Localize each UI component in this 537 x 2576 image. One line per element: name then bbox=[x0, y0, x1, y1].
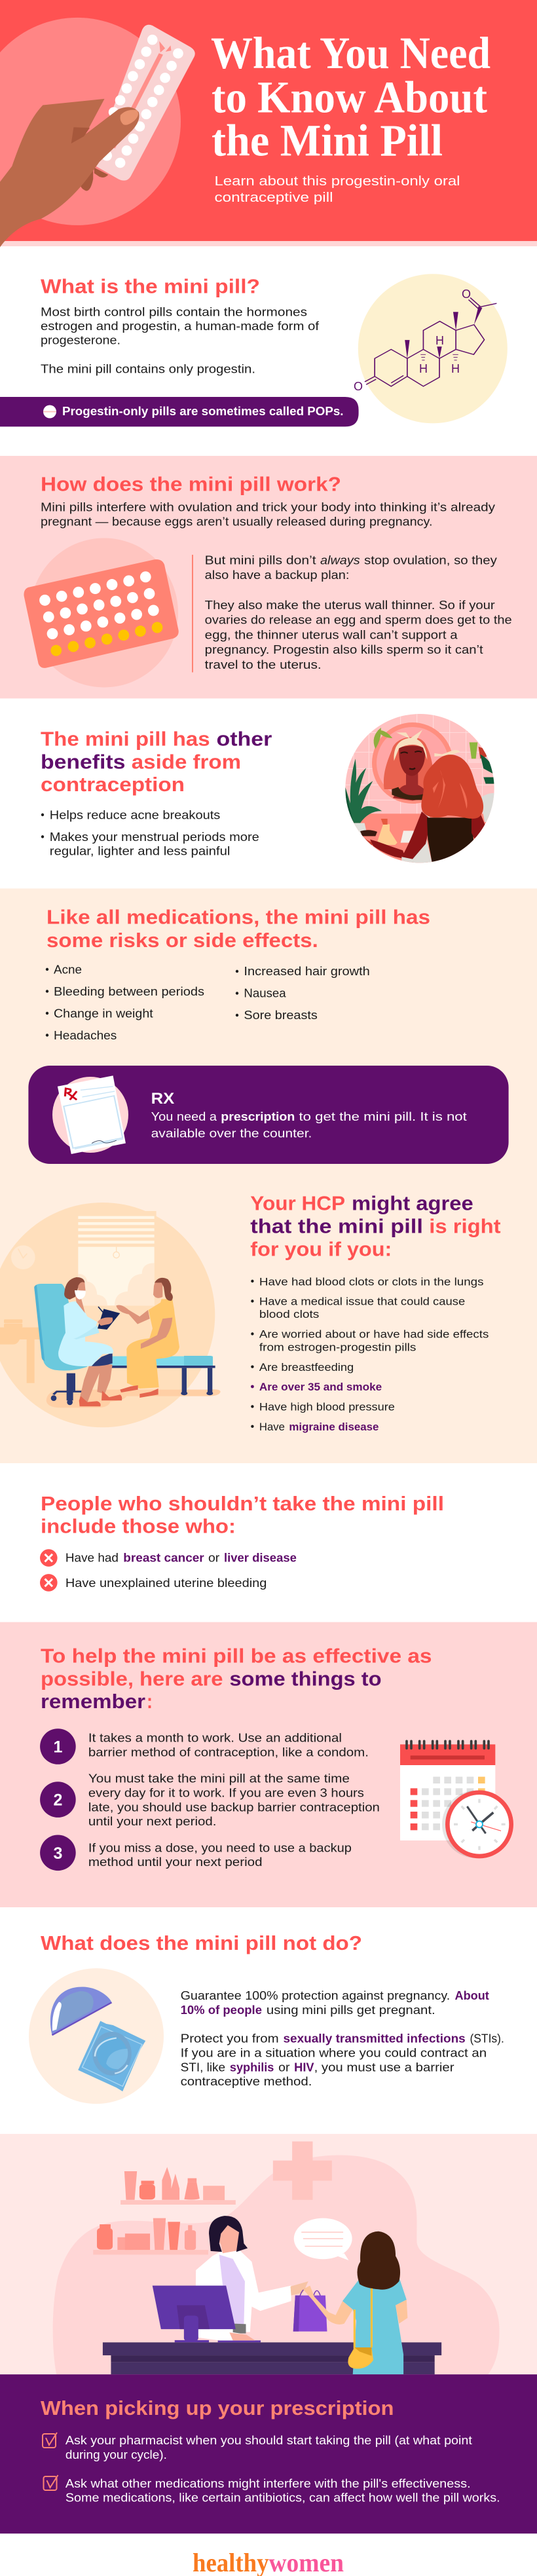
text: breast cancer or liver disease: or bbox=[208, 1552, 219, 1565]
icon: progesterone molecule: H bbox=[419, 362, 428, 375]
step 2: until your next period. bbox=[88, 1815, 216, 1828]
callout: RX card: RX bbox=[151, 1090, 174, 1108]
text block: backup plan: pregnancy. Progestin also kills sperm so it can’t bbox=[205, 643, 483, 656]
text block: HIV bbox=[294, 2061, 314, 2074]
panel: what is the mini pill bbox=[0, 274, 508, 426]
icon: x mark bbox=[40, 1549, 58, 1567]
step 2: You must take the mini pill at the same time bbox=[88, 1772, 350, 1785]
text: breast cancer or liver disease: Have had bbox=[65, 1552, 119, 1565]
bullet list bbox=[41, 809, 259, 857]
heading bbox=[41, 1645, 432, 1713]
heading: People who shouldn’t take the mini pill bbox=[41, 1492, 444, 1515]
text block: (STIs). bbox=[470, 2032, 504, 2045]
panel: risks and HCP advice bbox=[0, 888, 537, 1463]
text block bbox=[41, 305, 320, 375]
text block: backup plan: But mini pills don’t bbox=[205, 553, 316, 567]
text block bbox=[181, 1989, 504, 2088]
step 3: 3 bbox=[53, 1844, 62, 1863]
text: breast cancer or liver disease: breast cancer bbox=[123, 1552, 204, 1565]
icon: pill bbox=[43, 405, 56, 418]
heading: HCP: is right bbox=[429, 1214, 501, 1238]
illustration: diaphragm and condom bbox=[29, 1968, 164, 2104]
text block: using mini pills get pregnant. bbox=[267, 2004, 435, 2017]
text block: intro: Mini pills interfere with ovulation and trick your body into thinking it’s already bbox=[41, 501, 495, 514]
text block: estrogen and progestin, a human-made form of bbox=[41, 320, 320, 333]
step 3: If you miss a dose, you need to use a backup bbox=[88, 1842, 352, 1855]
heading: HCP: Your HCP bbox=[250, 1191, 345, 1214]
bullet list: HCP: Are over 35 and smoke bbox=[259, 1381, 382, 1393]
heading: aside from bbox=[132, 751, 241, 773]
text: breast cancer or liver disease: liver disease bbox=[224, 1552, 297, 1565]
text block: Ask what other medications might interfere with the pill's effectiveness. bbox=[65, 2477, 471, 2490]
text block bbox=[65, 2477, 500, 2505]
text block: progesterone. bbox=[41, 334, 120, 347]
icon: x mark bbox=[40, 1574, 58, 1592]
heading: What does the mini pill not do? bbox=[41, 1932, 362, 1954]
bullet list: left column: Change in weight bbox=[54, 1007, 153, 1020]
bullet list: left column: Headaches bbox=[54, 1029, 117, 1042]
panel: picking up prescription bbox=[0, 2374, 537, 2533]
text block: , you must use a barrier bbox=[314, 2061, 454, 2074]
heading: To help the mini pill be as effective as bbox=[41, 1645, 432, 1668]
heading: remember bbox=[41, 1690, 145, 1713]
panel: who shouldn't take it bbox=[40, 1492, 444, 1592]
text block: intro bbox=[41, 501, 495, 528]
heading bbox=[41, 1492, 444, 1538]
text block: backup plan: stop ovulation, so they bbox=[364, 553, 497, 567]
bullet list: right column: Sore breasts bbox=[244, 1009, 318, 1022]
text block: The mini pill contains only progestin. bbox=[41, 362, 255, 375]
heading: include those who: bbox=[41, 1514, 236, 1538]
panel: other benefits bbox=[41, 711, 498, 868]
text block: STI, like bbox=[181, 2061, 225, 2074]
callout: RX card bbox=[28, 1066, 509, 1164]
text: unexplained bleeding: Have unexplained uterine bleeding bbox=[65, 1577, 267, 1590]
heading: side effects: Like all medications, the mini pill has bbox=[46, 906, 430, 929]
heading: HCP: that the mini pill bbox=[250, 1214, 423, 1238]
text block: backup plan: ovaries do release an egg and sperm does get to the bbox=[205, 613, 512, 626]
heading: possible, here are bbox=[41, 1667, 223, 1690]
bullet list: HCP: Have bbox=[259, 1421, 285, 1433]
bullet list: right column bbox=[236, 965, 370, 1022]
text: breast cancer or liver disease bbox=[65, 1552, 297, 1565]
subtitle: Learn about this progestin-only oral bbox=[215, 174, 460, 189]
callout: POPs bbox=[0, 397, 359, 426]
bullet list: HCP: Have a medical issue that could cause bbox=[259, 1296, 465, 1308]
panel: what it does not do bbox=[29, 1932, 504, 2104]
title: to Know About bbox=[212, 72, 487, 122]
text block: Protect you from bbox=[181, 2032, 279, 2045]
heading: side effects bbox=[46, 906, 430, 952]
icon: progesterone molecule: H bbox=[451, 362, 460, 375]
step 3 bbox=[40, 1835, 352, 1871]
heading: When picking up your prescription bbox=[41, 2397, 394, 2419]
text block: prescription bbox=[221, 1110, 295, 1123]
step 1: barrier method of contraception, like a condom. bbox=[88, 1746, 369, 1759]
illustration: woman at mirror bbox=[341, 711, 498, 868]
title: What You Need bbox=[211, 28, 491, 78]
heading: HCP bbox=[250, 1191, 501, 1260]
text block: You need a bbox=[151, 1110, 217, 1123]
icon: progesterone molecule: O bbox=[354, 380, 363, 393]
heading bbox=[41, 727, 272, 796]
bullet list: regular, lighter and less painful bbox=[50, 844, 230, 857]
heading: other bbox=[216, 727, 272, 750]
icon: progesterone molecule: H bbox=[435, 334, 444, 347]
heading: contraception bbox=[41, 773, 185, 796]
icon: pill pack bbox=[24, 538, 179, 688]
icon: progesterone molecule bbox=[354, 274, 508, 423]
bullet list: HCP: blood clots bbox=[259, 1309, 319, 1320]
text block: or bbox=[278, 2061, 289, 2074]
icon: progesterone molecule: O bbox=[462, 288, 471, 301]
text block: backup plan: travel to the uterus. bbox=[205, 658, 322, 671]
text block: If you are in a situation where you could contract an bbox=[181, 2047, 487, 2060]
text block: syphilis bbox=[230, 2061, 274, 2074]
step 1: It takes a month to work. Use an additional bbox=[88, 1732, 342, 1745]
text block: sexually transmitted infections bbox=[283, 2032, 466, 2045]
heading: benefits bbox=[41, 751, 125, 773]
bullet list: left column bbox=[46, 963, 204, 1042]
heading: side effects: some risks or side effects. bbox=[46, 929, 318, 952]
text block: About bbox=[454, 1989, 489, 2002]
logo: healthywomen bbox=[193, 2548, 344, 2576]
bullet list: Helps reduce acne breakouts bbox=[50, 809, 220, 822]
heading: How does the mini pill work? bbox=[41, 472, 341, 495]
text block: Ask your pharmacist when you should start taking the pill (at what point bbox=[65, 2434, 472, 2447]
subtitle bbox=[215, 174, 460, 205]
panel: hero header bbox=[0, 0, 537, 247]
step 3: method until your next period bbox=[88, 1856, 263, 1869]
text block: to get the mini pill. It is not bbox=[299, 1110, 467, 1123]
heading: : bbox=[147, 1690, 153, 1713]
title bbox=[211, 28, 491, 166]
bullet list: HCP: Are breastfeeding bbox=[259, 1362, 354, 1373]
bullet list: HCP: migraine disease bbox=[289, 1421, 379, 1433]
panel: how does it work bbox=[0, 456, 537, 698]
bullet list: HCP: Are worried about or have had side effects bbox=[259, 1328, 489, 1340]
step 2: 2 bbox=[53, 1791, 62, 1810]
bullet list: HCP bbox=[251, 1276, 489, 1433]
icon: checkbox bbox=[43, 2475, 58, 2490]
bullet list: left column: Bleeding between periods bbox=[54, 985, 204, 998]
icon: calendar and clock bbox=[400, 1741, 513, 1858]
text block: backup plan: egg, the thinner uterus wall can’t support a bbox=[205, 628, 458, 641]
text block bbox=[151, 1110, 467, 1140]
text block: available over the counter. bbox=[151, 1127, 312, 1140]
text block: backup plan: always bbox=[320, 553, 360, 567]
heading: HCP: for you if you: bbox=[250, 1237, 392, 1260]
step 2 bbox=[40, 1772, 380, 1828]
bullet list: HCP: from estrogen-progestin pills bbox=[259, 1341, 416, 1353]
text block: backup plan: They also make the uterus wall thinner. So if your bbox=[205, 599, 495, 612]
text block: Guarantee 100% protection against pregnancy. bbox=[181, 1989, 450, 2002]
text block: intro: pregnant — because eggs aren’t usually released during pregnancy. bbox=[41, 515, 432, 528]
bullet list: right column: Increased hair growth bbox=[244, 965, 370, 978]
text block: during your cycle). bbox=[65, 2448, 167, 2461]
step 1 bbox=[40, 1728, 369, 1764]
bullet list: right column: Nausea bbox=[244, 987, 287, 1000]
bullet list: Makes your menstrual periods more bbox=[50, 831, 259, 844]
icon: prescription paper bbox=[52, 1075, 128, 1154]
text block: 10% of people bbox=[181, 2004, 262, 2017]
title: the Mini Pill bbox=[212, 116, 443, 166]
illustration: pharmacy scene bbox=[0, 2134, 537, 2375]
text block: backup plan: also have a backup plan: bbox=[205, 569, 349, 582]
heading: HCP: might agree bbox=[352, 1191, 473, 1214]
panel: things to remember bbox=[0, 1622, 537, 1907]
text block: backup plan bbox=[205, 553, 512, 671]
step 1: 1 bbox=[53, 1738, 62, 1757]
illustration: doctor and patient bbox=[0, 1203, 221, 1427]
subtitle: contraceptive pill bbox=[215, 191, 333, 205]
icon: checkbox bbox=[43, 2433, 57, 2448]
callout: POPs: Progestin-only pills are sometimes called POPs. bbox=[62, 405, 343, 418]
text block: Most birth control pills contain the hormones bbox=[41, 305, 307, 318]
heading: What is the mini pill? bbox=[41, 275, 260, 298]
bullet list: HCP: Have had blood clots or clots in the lungs bbox=[259, 1276, 483, 1288]
text block: Some medications, like certain antibiotics, can affect how well the pill works. bbox=[65, 2492, 500, 2505]
bullet list: HCP: Have high blood pressure bbox=[259, 1402, 395, 1413]
step 2: every day for it to work. If you are even 3 hours bbox=[88, 1786, 364, 1799]
bullet list: left column: Acne bbox=[54, 963, 82, 977]
text block: contraceptive method. bbox=[181, 2075, 312, 2088]
heading: The mini pill has bbox=[41, 727, 210, 750]
step 2: late, you should use backup barrier contraception bbox=[88, 1801, 380, 1814]
heading: some things to bbox=[229, 1667, 382, 1690]
text block bbox=[65, 2434, 472, 2461]
icon: hand holding pill pack bbox=[0, 18, 195, 247]
